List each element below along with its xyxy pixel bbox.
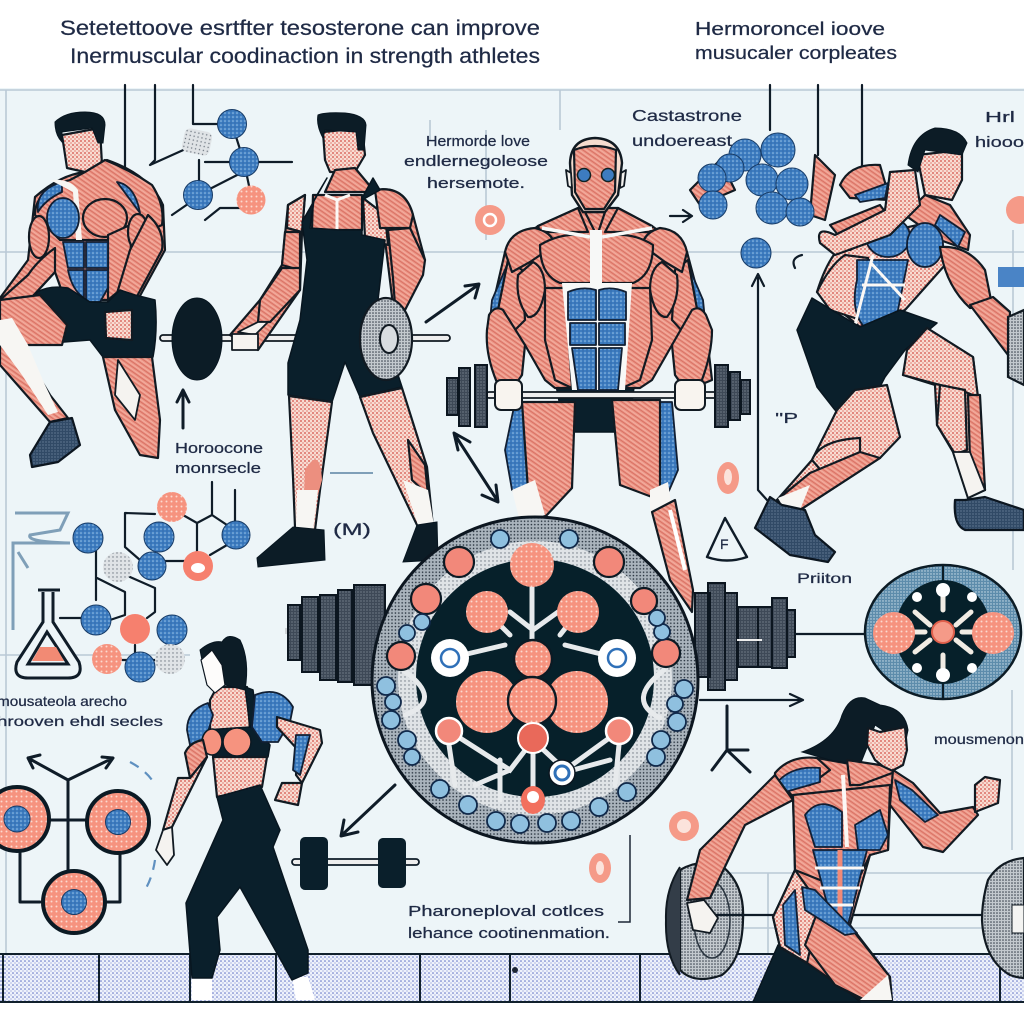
text: UP label: ''P (775, 410, 798, 427)
text: movement label: mousmenon (934, 731, 1024, 747)
figure: male athlete right lunging (755, 85, 1024, 562)
floor marker dot (512, 967, 518, 973)
text: hormone molecule label (175, 440, 263, 477)
molecule: top left (125, 85, 292, 220)
text: hormone molecule label: monrsecle (175, 460, 261, 477)
figure: female athlete left (156, 636, 322, 1000)
figure: central male athlete anatomy (447, 138, 750, 612)
top right heading: Hermoroncel ioove (695, 19, 885, 39)
arrow: to big circle (454, 433, 498, 502)
icon: right pink token (1006, 196, 1024, 224)
icon: blue node with arrow (670, 210, 802, 500)
icon: forked connector (712, 706, 750, 772)
text: right edge label: Hrl (985, 109, 1015, 126)
chart: large circular cell diagram (372, 517, 698, 843)
arrow: to dumbbell (341, 785, 395, 836)
text: bottom left caption: mousateola arecho (0, 693, 127, 709)
arrow: faint pointer (330, 472, 373, 474)
molecule: left network (13, 482, 250, 682)
figure: male athlete left (0, 112, 165, 467)
icon: triangle: F (720, 536, 729, 552)
icon: pink droplet (717, 462, 739, 494)
floor band (0, 954, 1024, 1002)
arrow: to right (700, 694, 803, 706)
text: hormone label (404, 134, 548, 192)
title: Setetettoove esrtfter tesosterone can improve (60, 17, 540, 40)
text: hormone molecule label: Horoocone (175, 440, 263, 457)
icon: pink token near woman (669, 811, 699, 841)
text: hormone label: hersemote. (427, 176, 525, 192)
title (60, 17, 540, 68)
icon: triangle (707, 518, 747, 560)
text: hormone label: endlernegoleose (404, 154, 548, 170)
text: hormone label: Hermorde love (426, 134, 530, 150)
text: lower caption: Pharoneploval cotlces (408, 903, 604, 920)
icon: pink token (475, 205, 505, 235)
figure: male athlete with barbell (160, 113, 450, 567)
text: bottom left caption: hrooven ehdl secles (0, 713, 163, 729)
top right heading (695, 19, 897, 63)
dumbbell: small (292, 837, 419, 890)
icon: flask (16, 590, 80, 678)
top right heading: musucaler corpleates (695, 43, 897, 63)
text: castastrone label (632, 108, 742, 150)
dumbbell: behind big circle (285, 583, 795, 690)
molecule: blue cluster (690, 85, 835, 226)
title: Inermuscular coodinaction in strength athletes (70, 45, 540, 68)
text: castastrone label: undoereast (632, 133, 733, 150)
text: lower caption (408, 835, 630, 942)
text: castastrone label: Castastrone (632, 108, 742, 125)
icon: pink token lower (589, 853, 611, 883)
icon: right blue tag (998, 267, 1024, 287)
text: right edge label (975, 109, 1024, 151)
diagram: bottom left ring cells (0, 755, 155, 933)
text: right edge label: hiooo (975, 134, 1024, 151)
arrow: man to centre (426, 284, 479, 322)
text: lower caption: lehance cootinenmation. (408, 925, 610, 942)
text: M label: (M) (333, 520, 371, 539)
arrow: up (177, 390, 189, 428)
figure: female athlete right (687, 698, 1000, 1002)
chart: small circular cell detail (795, 565, 1021, 699)
text: bottom left caption (0, 693, 163, 729)
text: protein label: Priiton (797, 570, 852, 586)
barbell: bottom right (666, 858, 1024, 979)
